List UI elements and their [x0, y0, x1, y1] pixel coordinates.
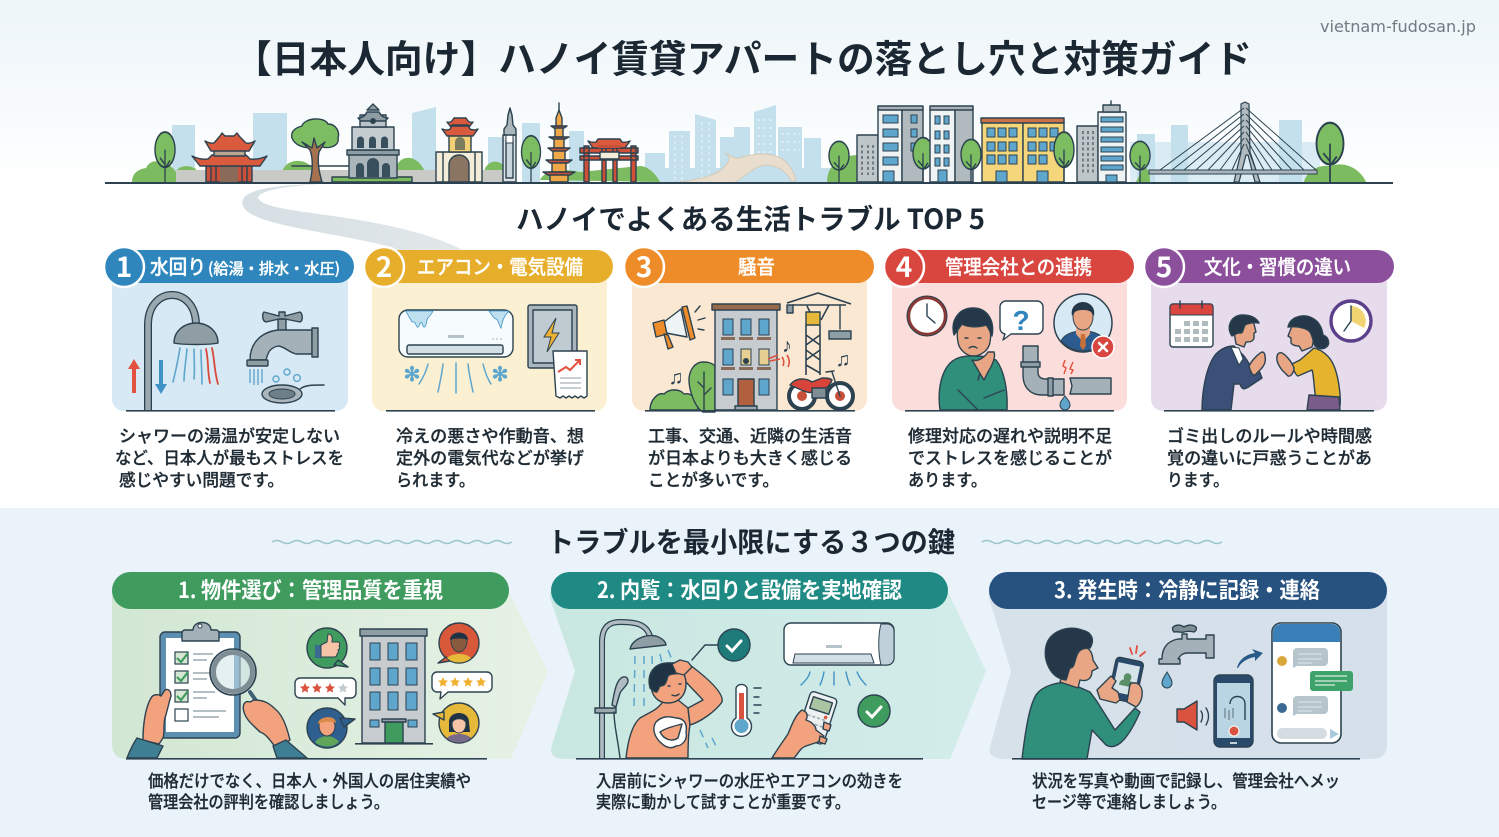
key 2 chevron background	[550, 592, 986, 759]
section heading: top 5: ハノイでよくある生活トラブル TOP 5	[516, 198, 985, 238]
card 3 number: 3	[636, 246, 652, 286]
key 2 text: 入居前にシャワーの水圧やエアコンの効きを	[596, 767, 903, 792]
card 4 label: 管理会社との連携	[945, 251, 1092, 280]
card 3 text: が日本よりも大きく感じる	[648, 444, 852, 469]
card 4 header	[884, 246, 1134, 287]
key 3 base line	[1012, 758, 1360, 760]
white tower building	[1077, 101, 1126, 182]
key 3 header	[989, 572, 1387, 609]
apartment building B	[930, 106, 973, 182]
card 3 header	[624, 246, 874, 287]
citadel gate	[436, 118, 482, 182]
window strips on distant city	[675, 120, 800, 180]
trees	[155, 132, 1150, 182]
card 5 text: 覚の違いに戸惑うことがあ	[1167, 444, 1372, 469]
card 1 number: 1	[116, 246, 132, 286]
key 3 text	[1032, 767, 1340, 813]
card 2 base line	[386, 410, 595, 412]
red temple	[192, 133, 267, 182]
card 2 text: 冷えの悪さや作動音、想	[396, 422, 584, 447]
dragon bridge curve	[680, 153, 796, 183]
ground line	[105, 182, 1393, 184]
key 1 text: 管理会社の評判を確認しましょう。	[148, 788, 389, 813]
key 2 text	[596, 767, 903, 813]
card 1 illustration: shower and faucet	[128, 295, 324, 410]
card 5 text: ります。	[1167, 466, 1229, 491]
key 3 text: 状況を写真や動画で記録し、管理会社へメッ	[1032, 767, 1340, 792]
key 3 illustration: recording leak with phone	[1022, 623, 1353, 759]
card 2 illustration: ac and power panel: ✻	[492, 364, 508, 386]
card 1 base line	[126, 410, 335, 412]
key 1 panel: choosing a property	[112, 572, 548, 813]
pagoda	[543, 103, 575, 182]
card 3 number	[624, 246, 664, 287]
green bushes	[132, 155, 1366, 182]
card 1 label	[150, 251, 340, 280]
clock tower	[503, 108, 516, 182]
card 4 illustration: worried man, broken pipe	[907, 294, 1114, 410]
card 4 text: あります。	[908, 466, 987, 491]
citadel wall	[176, 166, 504, 182]
card 4 text: でストレスを感じることが	[908, 444, 1112, 469]
yellow building	[981, 118, 1064, 182]
card 5 panel	[1151, 270, 1387, 411]
card 5 text: ゴミ出しのルールや時間感	[1167, 422, 1372, 447]
card 1 label: 水回り	[150, 251, 206, 280]
key 3 chevron background	[989, 592, 1387, 759]
card 2: air conditioner and electrics	[364, 246, 613, 491]
card 3 illustration: building, crane, motorbike	[650, 293, 853, 412]
key 3 header: 3. 発生時：冷静に記録・連絡	[1054, 573, 1320, 605]
card 5 header	[1144, 246, 1394, 287]
skyline illustration	[105, 101, 1393, 184]
card 3 illustration: building, crane, motorbike: ♫	[836, 349, 850, 371]
key 2 panel: viewing check	[550, 572, 986, 813]
key 1 header: 1. 物件選び：管理品質を重視	[178, 573, 443, 605]
card 1 text: シャワーの湯温が安定しない	[119, 422, 340, 447]
key 1 text: 価格だけでなく、日本人・外国人の居住実績や	[148, 767, 471, 792]
card 1 text: 感じやすい問題です。	[119, 466, 284, 491]
card 5 base line	[1164, 410, 1374, 412]
card 1 number	[104, 246, 144, 287]
card 2 label: エアコン・電気設備	[417, 251, 583, 280]
card 5 label: 文化・習慣の違い	[1204, 251, 1351, 280]
apartment building A	[857, 106, 923, 182]
card 3 illustration: building, crane, motorbike: ♪	[782, 335, 792, 357]
key 1 base line	[126, 758, 487, 760]
card 2 text	[396, 422, 584, 491]
section heading: three keys: トラブルを最小限にする３つの鍵	[547, 521, 955, 561]
card 1 header	[104, 246, 354, 287]
card 3 illustration: building, crane, motorbike: ♫	[668, 367, 684, 389]
card 3 text: ことが多いです。	[648, 466, 779, 491]
watermark: vietnam-fudosan.jp	[1320, 17, 1476, 36]
card 1 text: など、日本人が最もストレスを	[115, 444, 344, 469]
distant city buildings	[172, 105, 1320, 182]
card 3 label: 騒音	[738, 251, 775, 280]
key 1 text	[148, 767, 471, 813]
card 3 panel	[632, 270, 867, 411]
card 3: noise	[624, 246, 874, 491]
card 4 panel	[892, 270, 1127, 411]
card 2 illustration: ac and power panel: ✻	[404, 364, 420, 386]
key 1 chevron background	[112, 592, 548, 759]
key 3 text: セージ等で連絡しましょう。	[1032, 788, 1226, 813]
card 4 illustration: worried man, broken pipe: ?	[1012, 305, 1030, 336]
card 1 text	[115, 422, 344, 491]
card 5: culture and habits	[1144, 246, 1394, 491]
card 4 text: 修理対応の遅れや説明不足	[908, 422, 1112, 447]
key 2 text: 実際に動かして試すことが重要です。	[596, 788, 850, 813]
turtle tower	[332, 104, 412, 182]
card 4: management company	[884, 246, 1134, 491]
key 3 panel: record and contact	[989, 572, 1387, 813]
road curve	[242, 184, 466, 252]
card 4 base line	[905, 410, 1114, 412]
card 5 text	[1167, 422, 1372, 491]
red gate	[580, 139, 638, 182]
card 1 panel	[112, 270, 348, 411]
card 4 text	[908, 422, 1112, 491]
section heading: three keys	[272, 521, 1222, 561]
card 1 label: (給湯・排水・水圧)	[208, 257, 340, 279]
card 2 text: られます。	[396, 466, 475, 491]
key 1 illustration: checklist, reviews, building	[127, 622, 492, 758]
key 1 header	[112, 572, 509, 609]
card 2 header	[364, 246, 613, 287]
card 5 number	[1144, 246, 1184, 287]
card 2 text: 定外の電気代などが挙げ	[396, 444, 584, 469]
card 3 text	[648, 422, 852, 491]
key 2 illustration: shower test and ac remote	[595, 622, 894, 758]
card 3 base line	[645, 410, 855, 412]
key 2 base line	[576, 758, 923, 760]
card 5 number: 5	[1156, 246, 1172, 286]
card 1: water	[104, 246, 354, 491]
card 4 number: 4	[896, 246, 912, 286]
card 2 panel	[372, 270, 607, 411]
card 5 illustration: two people bowing, calendar, clock	[1170, 301, 1371, 410]
card 4 number	[884, 246, 924, 287]
card 2 illustration: ac and power panel	[399, 305, 587, 398]
card 2 number	[364, 246, 404, 287]
title: 【日本人向け】ハノイ賃貸アパートの落とし穴と対策ガイド	[234, 28, 1252, 84]
card 2 number: 2	[376, 246, 392, 286]
key 2 header: 2. 内覧：水回りと設備を実地確認	[597, 573, 902, 605]
cable-stayed bridge	[1149, 102, 1317, 182]
large tree	[292, 119, 339, 182]
card 3 text: 工事、交通、近隣の生活音	[648, 422, 852, 447]
